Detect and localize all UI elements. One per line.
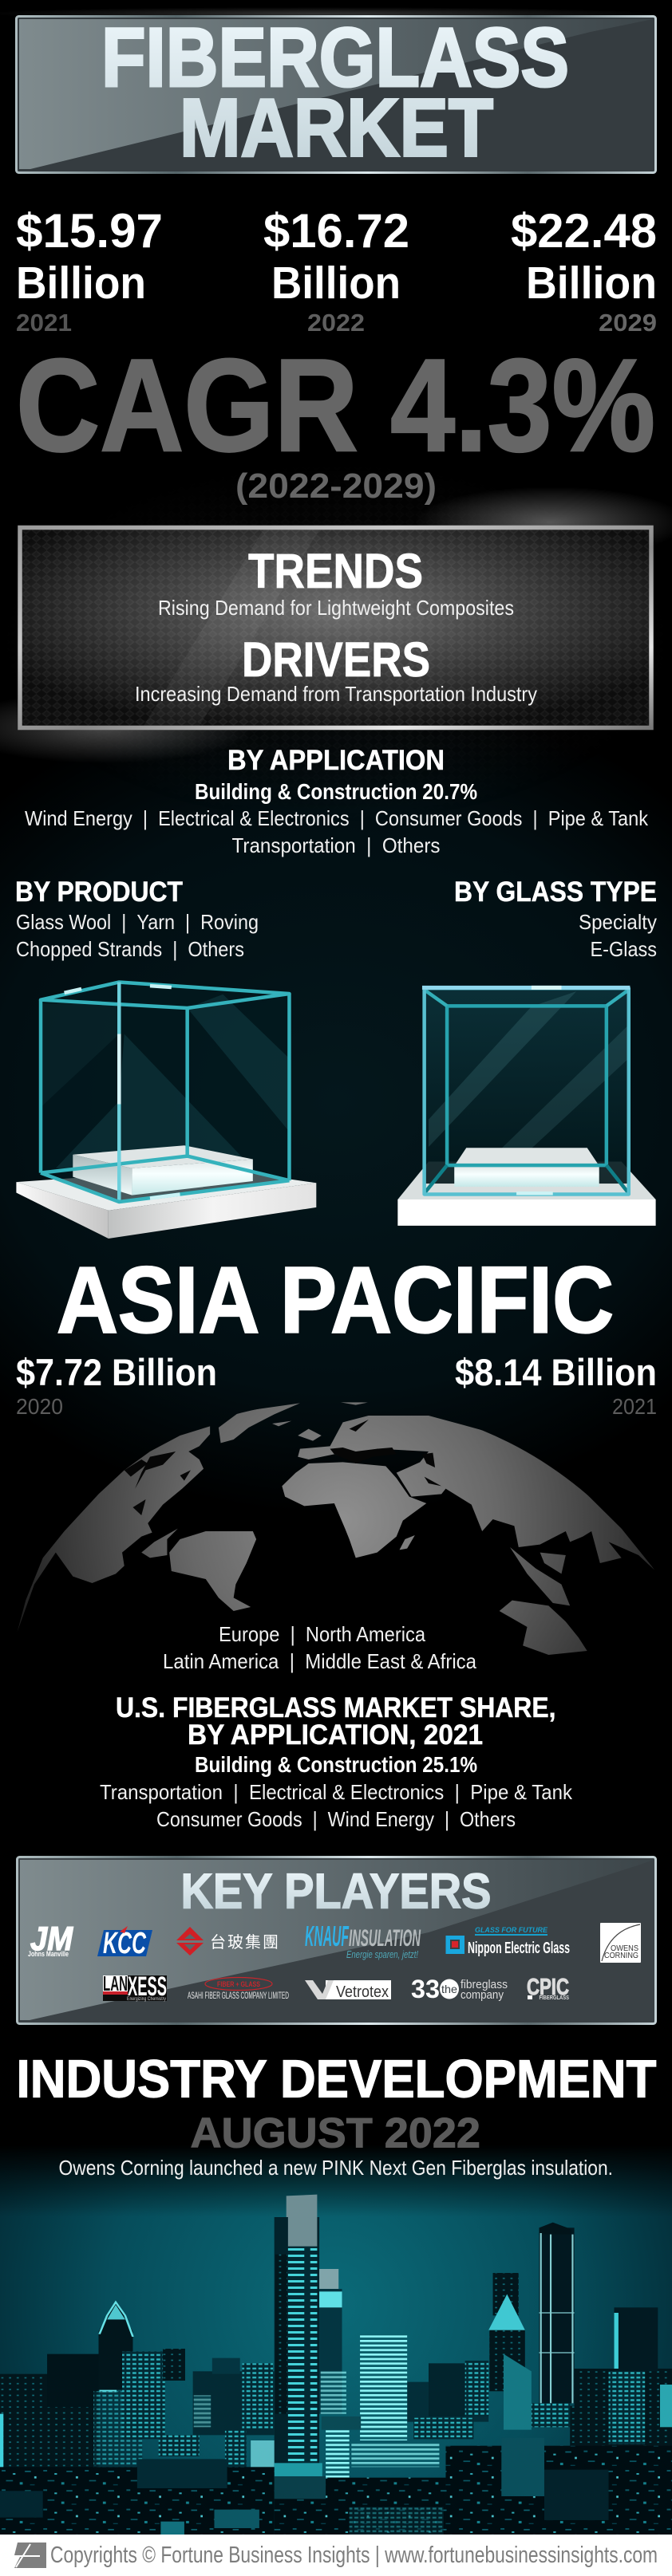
logo: Vetrotex	[305, 1980, 391, 2001]
trends heading: TRENDS	[248, 544, 423, 598]
logo: the fibreglass company: company	[461, 1988, 504, 2002]
logo: Owens Corning: CORNING	[604, 1952, 638, 1960]
stat: 2022 value	[263, 204, 409, 337]
title text: MARKET	[180, 81, 493, 174]
section: U.S. market share: Building & Construction 25.1%	[195, 1752, 477, 1777]
logo: Lanxess: LAN	[103, 1971, 128, 1995]
distant blocks	[0, 2354, 672, 2480]
section: by glass type: Specialty	[579, 910, 657, 934]
logo: the fibreglass company	[411, 1975, 508, 2003]
illustration: globe	[17, 1402, 656, 1655]
region heading: Asia Pacific: ASIA PACIFIC	[57, 1247, 614, 1353]
section: U.S. market share: U.S. FIBERGLASS MARKET SHARE,	[116, 1692, 555, 1723]
logo: Taiwan Glass: 台玻集團	[210, 1929, 279, 1952]
drivers heading: DRIVERS	[242, 632, 430, 687]
key players heading: KEY PLAYERS	[180, 1865, 492, 1919]
section: by product: Chopped Strands | Others	[16, 937, 244, 961]
section: by glass type: E-Glass	[591, 937, 657, 961]
right crown tower	[465, 2273, 532, 2430]
icon: Fortune Business Insights logo	[14, 2543, 46, 2568]
logo: KCC: KCC	[103, 1927, 146, 1960]
illustration: glass case front	[397, 987, 656, 1226]
section: by glass type	[454, 876, 657, 961]
illustration: night city skyline	[0, 2145, 672, 2535]
logo: Knauf Insulation: INSULATION	[349, 1925, 421, 1952]
logo: CPIC Fiberglass: FIBERGLASS	[540, 1995, 569, 2001]
glass reflection	[144, 530, 319, 726]
drivers text: Increasing Demand from Transportation Industry	[135, 682, 537, 706]
section: U.S. market share	[100, 1692, 573, 1831]
region value 2021: 2021	[612, 1394, 657, 1419]
region value 2021: $8.14 Billion	[455, 1351, 657, 1393]
panel glass highlight	[20, 1860, 653, 2020]
logo: CPIC Fiberglass: CPIC	[527, 1975, 569, 2000]
logo: Lanxess	[103, 1971, 167, 2002]
page background	[0, 8, 672, 1459]
logo: Asahi Fiber Glass	[188, 1978, 289, 2001]
region value 2020: $7.72 Billion	[16, 1351, 217, 1393]
logo: Taiwan Glass	[176, 1927, 279, 1956]
logo: Knauf Insulation: Energie sparen, jetzt!	[346, 1948, 418, 1960]
section: by glass type: BY GLASS TYPE	[454, 876, 657, 908]
panel: title	[16, 11, 656, 174]
second tower	[319, 2269, 346, 2414]
logo: the fibreglass company: the	[441, 1983, 457, 1995]
stat: 2022 value: Billion	[271, 258, 401, 309]
stat: 2021 value: $15.97	[16, 204, 163, 258]
region value 2020	[16, 1351, 217, 1419]
section: by application	[25, 745, 649, 857]
footer	[0, 2535, 672, 2576]
section: by application: Building & Construction 20.7%	[195, 779, 477, 804]
stat: 2029 value: 2029	[599, 309, 657, 337]
logo: Asahi Fiber Glass: ASAHI FIBER GLASS COMPANY LIMITED	[188, 1990, 289, 2001]
panel glass highlight	[19, 19, 653, 169]
stat: 2022 value: 2022	[307, 309, 365, 337]
list: other regions: Europe | North America	[219, 1622, 425, 1646]
dark tall tower with light lines	[540, 2223, 575, 2403]
logo: Asahi Fiber Glass: FIBER + GLASS	[217, 1980, 260, 1988]
stat: 2022 value: $16.72	[263, 204, 409, 258]
trends text: Rising Demand for Lightweight Composites	[158, 596, 514, 620]
date: AUGUST 2022	[190, 2110, 480, 2157]
stat: 2021 value: Billion	[16, 258, 146, 309]
logo: Johns Manville: Johns Manville	[28, 1950, 69, 1958]
midrise towers	[26, 2349, 273, 2467]
stat: 2021 value: 2021	[16, 309, 72, 337]
list: other regions	[163, 1622, 476, 1673]
illustration: glass case angled	[16, 982, 316, 1239]
logo: KCC	[97, 1926, 152, 1960]
section: by product: Glass Wool | Yarn | Roving	[16, 910, 259, 934]
region value 2021	[455, 1351, 657, 1419]
foreground rooftops	[0, 2438, 672, 2535]
development text: Owens Corning launched a new PINK Next Gen Fiberglas insulation.	[59, 2156, 613, 2180]
logo: Nippon Electric Glass: GLASS FOR FUTURE	[475, 1926, 548, 1934]
panel: key players	[18, 1857, 656, 2024]
list: other regions: Latin America | Middle East & Africa	[163, 1649, 476, 1673]
lit podium blocks	[225, 2416, 473, 2478]
stat: 2029 value: Billion	[526, 258, 657, 309]
main tower	[275, 2195, 319, 2470]
logo: Owens Corning	[600, 1923, 641, 1963]
section: by application: BY APPLICATION	[227, 745, 445, 776]
stat: 2029 value: $22.48	[511, 204, 657, 258]
logo: Lanxess: XESS	[128, 1971, 167, 2002]
logo: the fibreglass company: 33	[411, 1975, 440, 2003]
panel border	[20, 528, 651, 727]
section: by product	[15, 876, 259, 961]
section: by product: BY PRODUCT	[15, 876, 183, 908]
stat: 2029 value	[511, 204, 657, 337]
stat: 2021 value	[16, 204, 163, 337]
logo: Owens Corning: OWENS	[611, 1944, 638, 1953]
section: U.S. market share: Consumer Goods | Wind Energy | Others	[156, 1807, 516, 1831]
section: U.S. market share: BY APPLICATION, 2021	[188, 1719, 483, 1751]
panel: trends and drivers	[20, 528, 651, 727]
logo: Johns Manville: JM	[30, 1920, 73, 1957]
logo: Vetrotex: Vetrotex	[336, 1983, 389, 2001]
title text: FIBERGLASS	[101, 11, 569, 104]
left crown tower	[99, 2301, 132, 2393]
logo: Knauf Insulation	[305, 1920, 421, 1960]
logo: Nippon Electric Glass	[445, 1926, 570, 1957]
section: U.S. market share: Transportation | Electrical & Electronics | Pipe & Tank	[100, 1780, 573, 1804]
section: by application: Transportation | Others	[231, 833, 441, 857]
title text	[101, 11, 569, 174]
logo: Lanxess: Energizing Chemistry	[127, 1997, 166, 2002]
region value 2020: 2020	[16, 1394, 63, 1419]
logo: the fibreglass company: fibreglass	[461, 1978, 508, 1991]
logo: Knauf Insulation: KNAUF	[305, 1920, 349, 1952]
bright tower centre	[360, 2334, 407, 2440]
logo: Nippon Electric Glass: Nippon Electric Glass	[468, 1940, 570, 1957]
CAGR period: (2022-2029)	[235, 467, 437, 506]
right edge towers	[532, 2307, 672, 2451]
